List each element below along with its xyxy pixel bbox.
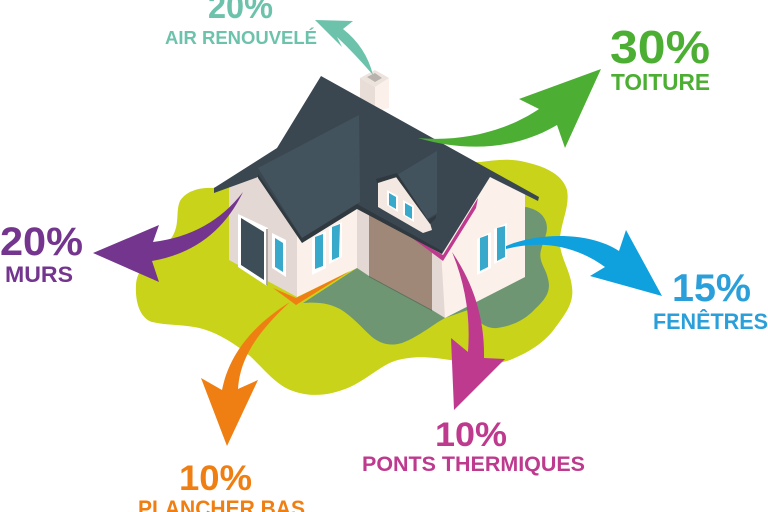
right wall [441, 170, 525, 318]
label: toiture [610, 21, 710, 95]
left gable wall [229, 165, 300, 297]
roof: eave shadow [258, 174, 442, 254]
door [238, 214, 268, 286]
arrow: air renouvele [315, 20, 373, 75]
window: left wall [272, 233, 286, 277]
inner corner wall [357, 200, 369, 276]
garage base line [369, 276, 432, 311]
dormer [376, 151, 437, 233]
front wall [297, 195, 357, 297]
label: fenetres: FENÊTRES [653, 309, 768, 334]
arrow: plancher bas [201, 302, 290, 446]
windows: front wall [312, 222, 342, 275]
arrow: fenetres [506, 230, 662, 296]
arrow: murs [93, 192, 243, 282]
arrow: ponts thermiques [451, 252, 505, 410]
label: ponts thermiques: PONTS THERMIQUES [362, 453, 585, 476]
floor line [273, 271, 350, 305]
house [214, 70, 539, 318]
label: plancher bas [138, 459, 305, 512]
garage wall [369, 205, 435, 310]
label: ponts thermiques: 10% [435, 416, 507, 454]
roof [214, 76, 539, 254]
arrow: toiture [418, 69, 601, 148]
house shadow on lawn [303, 207, 549, 345]
windows: right wall [477, 223, 507, 275]
label: murs: 20% [0, 220, 83, 264]
label: murs [0, 220, 83, 287]
label: toiture: 30% [610, 21, 710, 73]
label: toiture: TOITURE [611, 69, 710, 95]
lawn: lime ground blob [136, 160, 572, 395]
thermal bridge line under eave [408, 198, 478, 261]
label: air renouvele [165, 0, 317, 48]
label: air renouvele: AIR RENOUVELÉ [165, 27, 317, 48]
label: plancher bas: 10% [179, 459, 252, 498]
label: fenetres: 15% [672, 267, 751, 310]
label: fenetres [653, 267, 768, 334]
pillar [432, 245, 447, 318]
label: murs: MURS [5, 262, 73, 287]
label: ponts thermiques [362, 416, 585, 476]
roof: light gable face [258, 115, 360, 238]
chimney [360, 70, 389, 112]
